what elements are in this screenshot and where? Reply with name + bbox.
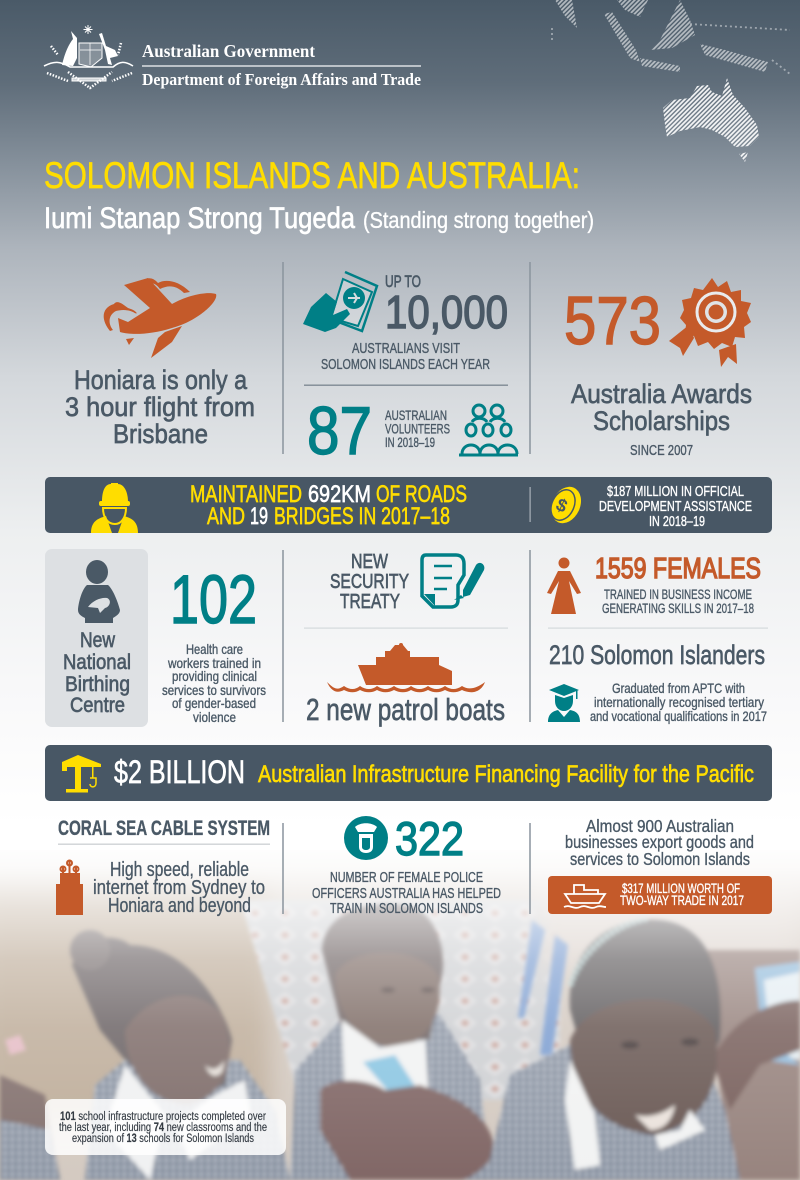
panel: scholarships: [564, 278, 752, 459]
icon: woman: [547, 558, 581, 614]
callout: school infrastructure: expansion of 13 schools for Solomon Islands: [72, 1133, 254, 1145]
icon: mother and baby: [78, 560, 120, 623]
stat: health care workers: workers trained in: [167, 655, 261, 671]
banner: infrastructure financing: $2 BILLION: [114, 754, 245, 790]
panel: scholarships: Australia Awards: [571, 379, 752, 409]
icon: award rosette: [669, 278, 751, 367]
banner: roads and aid: IN 2018–19: [649, 514, 705, 530]
icon: coin: [545, 482, 587, 528]
panel: female police: NUMBER OF FEMALE POLICE: [330, 869, 483, 886]
panel: trade: services to Solomon Islands: [570, 849, 750, 869]
panel: visitors: 87: [307, 393, 372, 469]
title: Iumi Stanap Strong Tugeda: [44, 202, 355, 235]
title: [44, 155, 594, 235]
panel: birthing centre: [45, 549, 148, 727]
icon: hand holding passport: [303, 272, 377, 332]
panel: security treaty: TREATY: [340, 590, 400, 613]
panel: scholarships: 573: [564, 283, 661, 359]
header: government wordmark: [142, 41, 421, 89]
callout: two-way trade: TWO-WAY TRADE IN 2017: [620, 893, 744, 908]
callout: school infrastructure: 101 school infrastructure projects completed over: [60, 1111, 266, 1123]
banner: roads and aid: BRIDGES IN 2017–18: [274, 503, 450, 530]
panel: graduates: Graduated from APTC with: [612, 680, 745, 696]
callout: two-way trade: [548, 876, 772, 914]
panel: females trained: [547, 553, 768, 629]
banner: roads and aid: OF ROADS: [376, 481, 467, 508]
stat: health care workers: [162, 561, 266, 725]
panel: coral sea cable: High speed, reliable: [110, 858, 249, 881]
panel: female police: 322: [395, 812, 464, 865]
panel: flight: Honiara is only a: [74, 365, 248, 395]
banner: infrastructure financing: [45, 745, 772, 801]
stat: health care workers: Health care: [186, 641, 243, 657]
callout: two-way trade: $317 MILLION WORTH OF: [622, 881, 740, 896]
stat: health care workers: services to survivors: [162, 682, 266, 698]
panel: visitors: UP TO: [385, 272, 421, 291]
panel: trade: businesses export goods and: [565, 832, 754, 852]
icon: crane: [62, 755, 101, 792]
panel: coral sea cable: [56, 816, 270, 917]
panel: graduates: internationally recognised tertiary: [594, 694, 764, 710]
title: SOLOMON ISLANDS AND AUSTRALIA:: [44, 155, 580, 196]
panel: birthing centre: National: [63, 651, 131, 674]
banner: roads and aid: AND: [207, 503, 245, 530]
icon: construction worker: [91, 483, 138, 533]
panel: coral sea cable: CORAL SEA CABLE SYSTEM: [58, 816, 270, 840]
panel: visitors: AUSTRALIANS VISIT: [352, 341, 460, 357]
icon: Australian coat of arms: [44, 25, 133, 88]
panel: scholarships: SINCE 2007: [630, 443, 693, 459]
panel: trade: [548, 816, 772, 914]
icon: cargo ship: [564, 885, 606, 908]
panel: visitors: SOLOMON ISLANDS EACH YEAR: [321, 357, 490, 373]
right background person: [705, 950, 800, 1180]
panel: security treaty: 2 new patrol boats: [306, 692, 505, 727]
photo: school children: [0, 840, 800, 1180]
panel: female police: [312, 812, 501, 917]
panel: security treaty: [304, 550, 508, 727]
banner: roads and aid: MAINTAINED: [190, 481, 302, 508]
panel: coral sea cable: Honiara and beyond: [108, 894, 251, 917]
icon: document and pen: [422, 555, 484, 607]
panel: coral sea cable: internet from Sydney to: [93, 876, 265, 899]
callout: school infrastructure: [45, 1099, 286, 1155]
panel: birthing centre: New: [80, 629, 116, 652]
panel: females trained: 1559 FEMALES: [595, 553, 761, 585]
panel: visitors: AUSTRALIAN: [385, 408, 447, 423]
panel: female police: TRAIN IN SOLOMON ISLANDS: [330, 900, 483, 917]
panel: security treaty: NEW: [351, 550, 389, 573]
icon: police officer badge: [344, 816, 388, 860]
panel: visitors: VOLUNTEERS: [385, 422, 450, 436]
panel: birthing centre: Birthing: [65, 673, 130, 696]
stat: health care workers: of gender-based: [172, 695, 256, 711]
right child: [485, 1045, 740, 1180]
icon: cable: [56, 860, 83, 915]
banner: roads and aid: DEVELOPMENT ASSISTANCE: [599, 499, 752, 515]
panel: scholarships: Scholarships: [593, 406, 730, 436]
chair legs: [518, 920, 568, 1055]
stat: health care workers: 102: [170, 561, 257, 638]
banner: roads and aid: 19: [250, 503, 268, 530]
middle child: [290, 1015, 490, 1180]
icon: coin: $: [553, 494, 570, 517]
panel: flight: Brisbane: [113, 419, 208, 449]
left child: [0, 1075, 60, 1180]
map: Australia and region: [552, 0, 790, 162]
icon: graduate: [548, 684, 580, 722]
panel: female police: OFFICERS AUSTRALIA HAS HELPED: [312, 885, 501, 902]
callout: school infrastructure: the last year, including 74 new classrooms and the: [59, 1122, 267, 1134]
title: (Standing strong together): [363, 207, 594, 233]
panel: birthing centre: Centre: [70, 694, 125, 717]
stat: health care workers: violence: [193, 709, 236, 725]
panel: visitors: 10,000: [385, 286, 508, 338]
icon: plane and clouds: [104, 278, 216, 358]
banner: roads and aid: 692KM: [308, 481, 371, 508]
column dividers: [283, 262, 530, 914]
panel: security treaty: SECURITY: [330, 570, 409, 593]
header: government wordmark: Department of Foreign Affairs and Trade: [142, 70, 421, 89]
panel: flight: [65, 278, 255, 449]
panel: graduates: [548, 640, 767, 724]
panel: flight: 3 hour flight from: [65, 392, 255, 422]
panel: trade: Almost 900 Australian: [586, 816, 734, 836]
icon: patrol boat: [327, 643, 485, 692]
icon: group of people: [459, 405, 518, 455]
stat: health care workers: providing clinical: [172, 668, 257, 684]
banner: roads and aid: $187 MILLION IN OFFICIAL: [607, 484, 744, 500]
header: government wordmark: Australian Government: [142, 41, 315, 61]
panel: visitors: IN 2018–19: [385, 435, 435, 450]
banner: roads and aid: [45, 477, 772, 533]
panel: visitors: [303, 272, 518, 469]
